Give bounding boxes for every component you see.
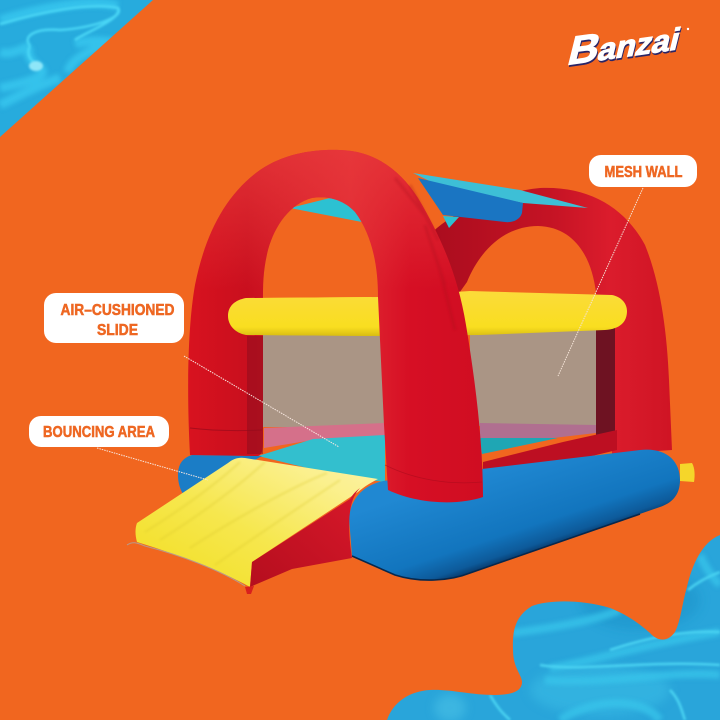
label: air-cushioned slide: [44, 293, 184, 343]
leader line: air-cushioned slide: [184, 356, 339, 447]
slide ground rope: [127, 543, 245, 586]
label: mesh wall: MESH WALL: [604, 164, 682, 181]
dark corner panel: [596, 328, 615, 436]
leader line: mesh wall: [558, 188, 643, 376]
front blue base: [349, 450, 680, 580]
bottom shadow: [352, 514, 640, 580]
slide red side: [250, 488, 360, 587]
logo trademark dot: [687, 28, 689, 30]
roof panel: [290, 173, 588, 228]
yellow nub: [680, 463, 695, 482]
leader line: bouncing area: [97, 448, 208, 480]
label: air-cushioned slide: AIR–CUSHIONED: [60, 302, 174, 319]
bouncer: inflatable castle: [127, 145, 695, 594]
mesh wall right: [470, 330, 598, 426]
red floor wall: [483, 430, 617, 482]
pink mesh skirt: [264, 423, 596, 453]
yellow bar: [228, 291, 627, 336]
mesh wall left: [262, 335, 386, 427]
slide anchor: [245, 586, 254, 594]
label: air-cushioned slide: SLIDE: [97, 322, 138, 339]
back blue base: [178, 455, 262, 497]
yellow bar: left end over arch leg: [228, 297, 372, 336]
floor: [258, 435, 558, 482]
slide: [136, 458, 378, 587]
back arch: [425, 188, 672, 454]
label: bouncing area: BOUNCING AREA: [43, 424, 155, 441]
logo: Banzai: Banzai: [564, 14, 687, 76]
pool water blob: bottom right: [380, 530, 720, 720]
front arch: [180, 145, 490, 505]
label: mesh wall: [589, 155, 697, 187]
pool water corner: top left: [0, 0, 160, 140]
logo: Banzai: Banzai: [564, 12, 686, 74]
label: bouncing area: [29, 416, 169, 447]
